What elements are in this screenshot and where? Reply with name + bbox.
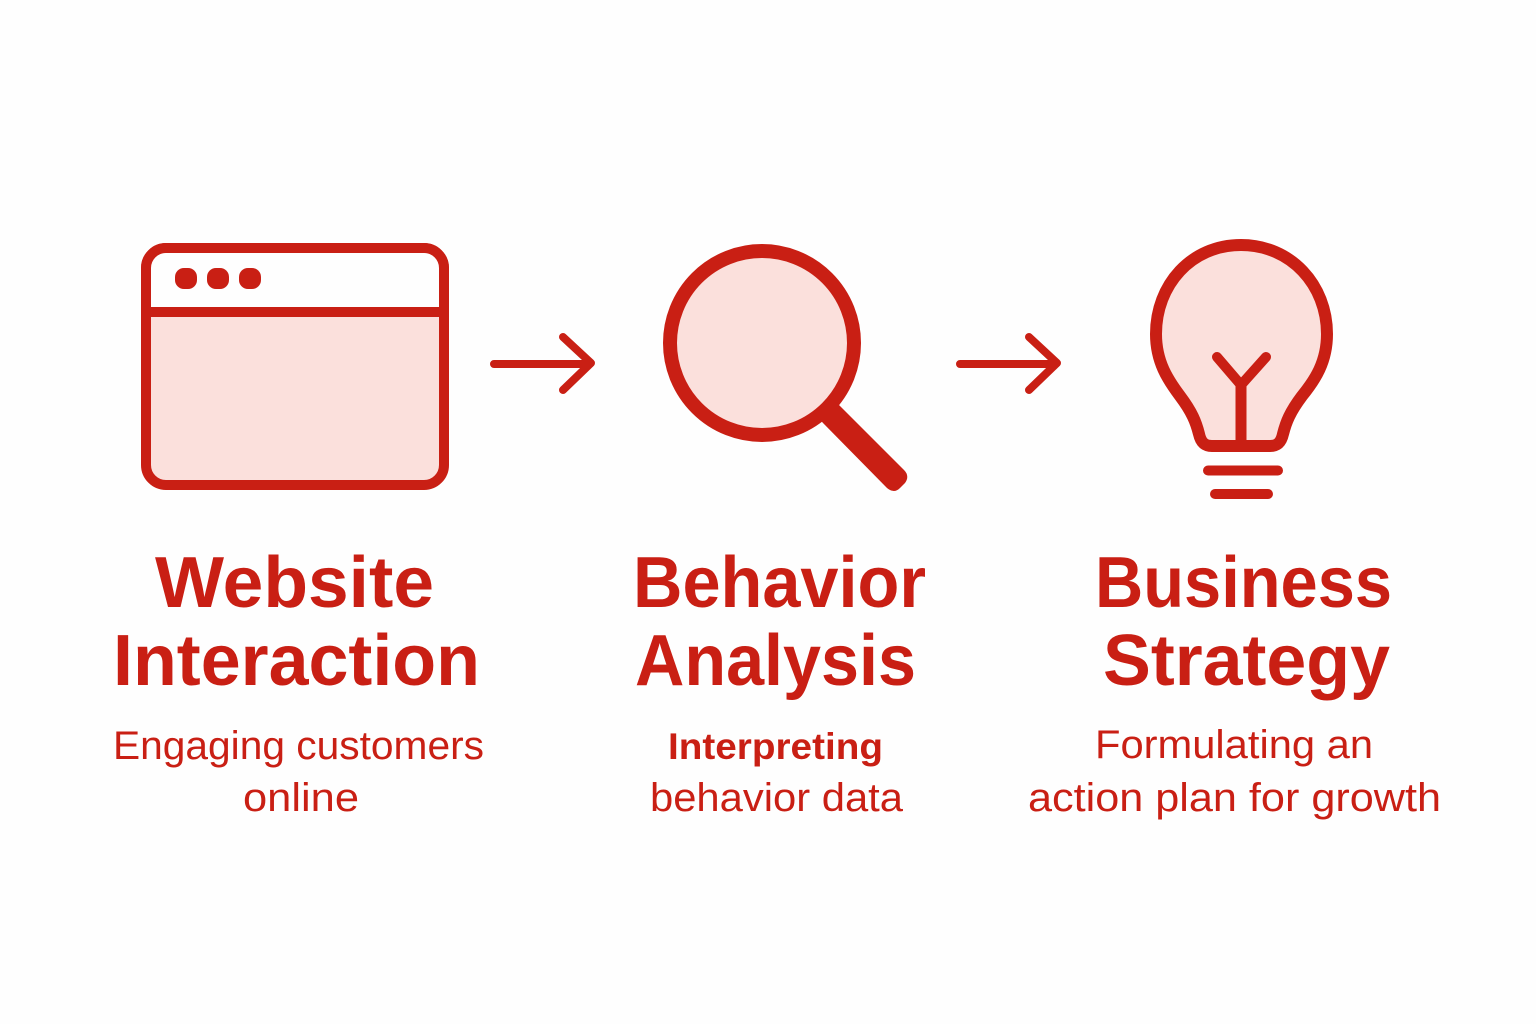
icon: browser window <box>146 248 444 485</box>
icon: light bulb <box>1156 245 1327 494</box>
heading: Business Strategy: Strategy <box>1103 621 1390 701</box>
description: Interpreting behavior data <box>650 726 904 820</box>
description: Engaging customers online: online <box>243 776 359 820</box>
heading: Business Strategy <box>1095 543 1392 701</box>
description: Formulating an action plan for growth: Formulating an <box>1095 723 1373 767</box>
heading: Behavior Analysis: Behavior <box>633 543 926 623</box>
heading: Business Strategy: Business <box>1095 543 1392 623</box>
heading: Website Interaction <box>113 543 480 701</box>
description: Formulating an action plan for growth: action plan for growth <box>1028 776 1441 820</box>
arrow: magnifier to light bulb <box>960 337 1057 390</box>
description: Interpreting behavior data: Interpreting <box>668 726 883 767</box>
heading: Website Interaction: Website <box>155 543 434 623</box>
arrow: browser to magnifier <box>494 337 591 390</box>
description: Engaging customers online <box>113 724 484 820</box>
heading: Website Interaction: Interaction <box>113 621 480 701</box>
description: Engaging customers online: Engaging customers <box>113 724 484 768</box>
description: Interpreting behavior data: behavior data <box>650 776 904 820</box>
description: Formulating an action plan for growth <box>1028 723 1441 820</box>
icon: magnifying glass <box>670 251 907 491</box>
heading: Behavior Analysis <box>633 543 926 701</box>
heading: Behavior Analysis: Analysis <box>635 621 916 701</box>
